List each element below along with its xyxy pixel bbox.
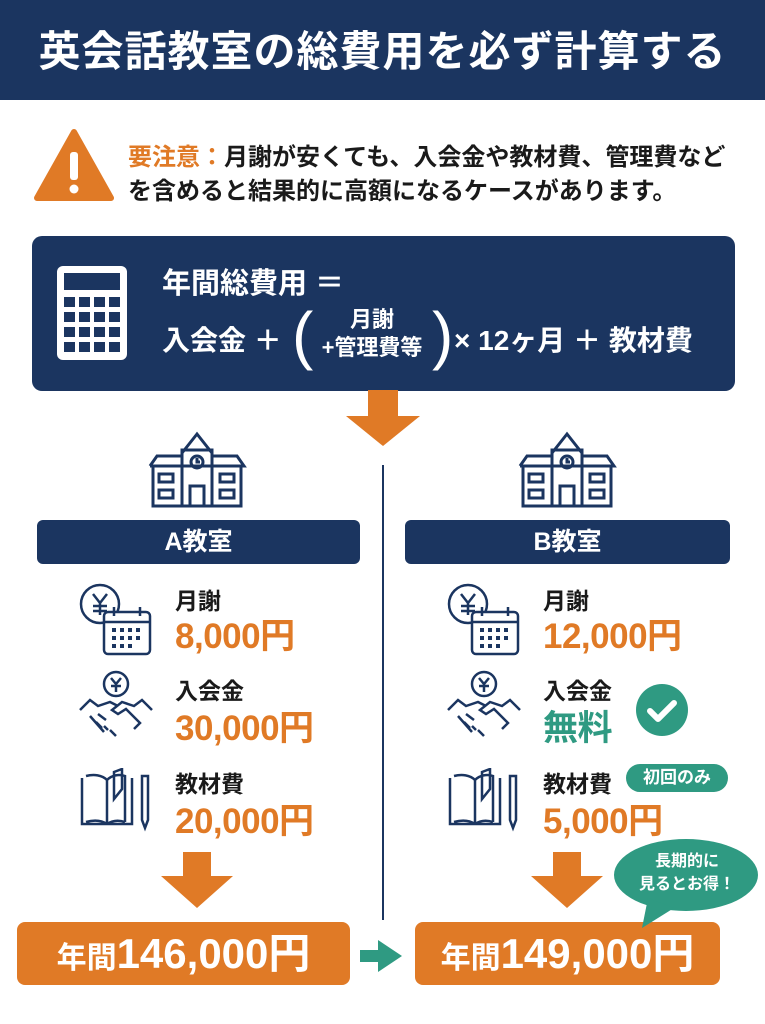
warning text: [128, 144, 725, 205]
heading: B教室: B教室: [533, 528, 602, 556]
badge: 初回のみ: [626, 764, 728, 792]
text: 月謝 B: [543, 588, 682, 656]
text: 入会金 B: [543, 678, 612, 748]
header band: [0, 0, 765, 100]
formula line 2: (: [292, 299, 313, 371]
arrow: teal compare: [360, 940, 402, 972]
heading: A教室: [37, 520, 360, 564]
panel: formula: [32, 236, 735, 391]
icon: check: [636, 684, 688, 736]
formula line 2: 入会金 ＋: [162, 325, 282, 356]
warning text: を含めると結果的に高額になるケースがあります。: [128, 178, 676, 205]
divider line: [382, 465, 384, 920]
result: A: [17, 922, 350, 985]
result: B: [415, 922, 720, 985]
callout: 長期的に見るとお得: [614, 839, 758, 928]
icon: calculator: [57, 266, 127, 360]
text: 月謝 B: 月謝: [543, 588, 589, 614]
text: 教材費 A: 教材費: [175, 771, 244, 797]
icon: book B: [448, 768, 518, 832]
text: 入会金 A: 入会金: [175, 678, 244, 704]
icon: school B: [518, 432, 617, 508]
text: 入会金 A: [175, 678, 314, 748]
icon: handshake A: [79, 670, 153, 737]
panel: B items: [447, 584, 728, 841]
arrow: B down: [531, 852, 603, 908]
formula line 2: [162, 299, 693, 371]
heading: A教室: A教室: [164, 528, 233, 556]
text: 月謝 B: 12,000円: [543, 617, 682, 656]
arrow: A down: [161, 852, 233, 908]
icon: yen calendar B: [448, 584, 520, 656]
icon: school A: [148, 432, 247, 508]
heading: B教室: [405, 520, 730, 564]
text: 月謝 A: 月謝: [175, 588, 221, 614]
formula line 2: 月謝: [350, 307, 394, 332]
icon: book A: [80, 768, 150, 832]
badge: 初回のみ: 初回のみ: [643, 768, 711, 787]
text: 教材費 B: 5,000円: [543, 802, 663, 841]
icon: warning: [34, 129, 114, 201]
icon: yen calendar A: [80, 584, 152, 656]
formula line 2: ): [432, 299, 453, 371]
formula line 1: 年間総費用 ＝: [162, 268, 344, 300]
title: 英会話教室の総費用を必ず計算する: [38, 28, 726, 75]
text: 入会金 B: 入会金: [543, 678, 612, 704]
callout: 長期的に見るとお得: 長期的に: [655, 853, 719, 870]
text: 教材費 B: [543, 771, 663, 841]
text: 教材費 A: 20,000円: [175, 802, 314, 841]
text: 教材費 B: 教材費: [543, 771, 612, 797]
formula line 2: +管理費等: [322, 335, 422, 360]
result: A: 年間146,000円: [57, 930, 310, 977]
warning text: 要注意：月謝が安くても、入会金や教材費、管理費など: [128, 144, 725, 171]
text: 入会金 B: 無料: [543, 709, 612, 748]
icon: handshake B: [447, 670, 521, 737]
formula line 2: × 12ヶ月 ＋ 教材費: [454, 325, 693, 356]
text: 教材費 A: [175, 771, 314, 841]
callout: 長期的に見るとお得: 見るとお得！: [639, 876, 735, 893]
result: B: 年間149,000円: [441, 930, 694, 977]
text: 月謝 A: 8,000円: [175, 617, 295, 656]
arrow: formula down: [346, 390, 420, 446]
panel: A items: [79, 584, 314, 841]
text: 月謝 A: [175, 588, 295, 656]
text: 入会金 A: 30,000円: [175, 709, 314, 748]
